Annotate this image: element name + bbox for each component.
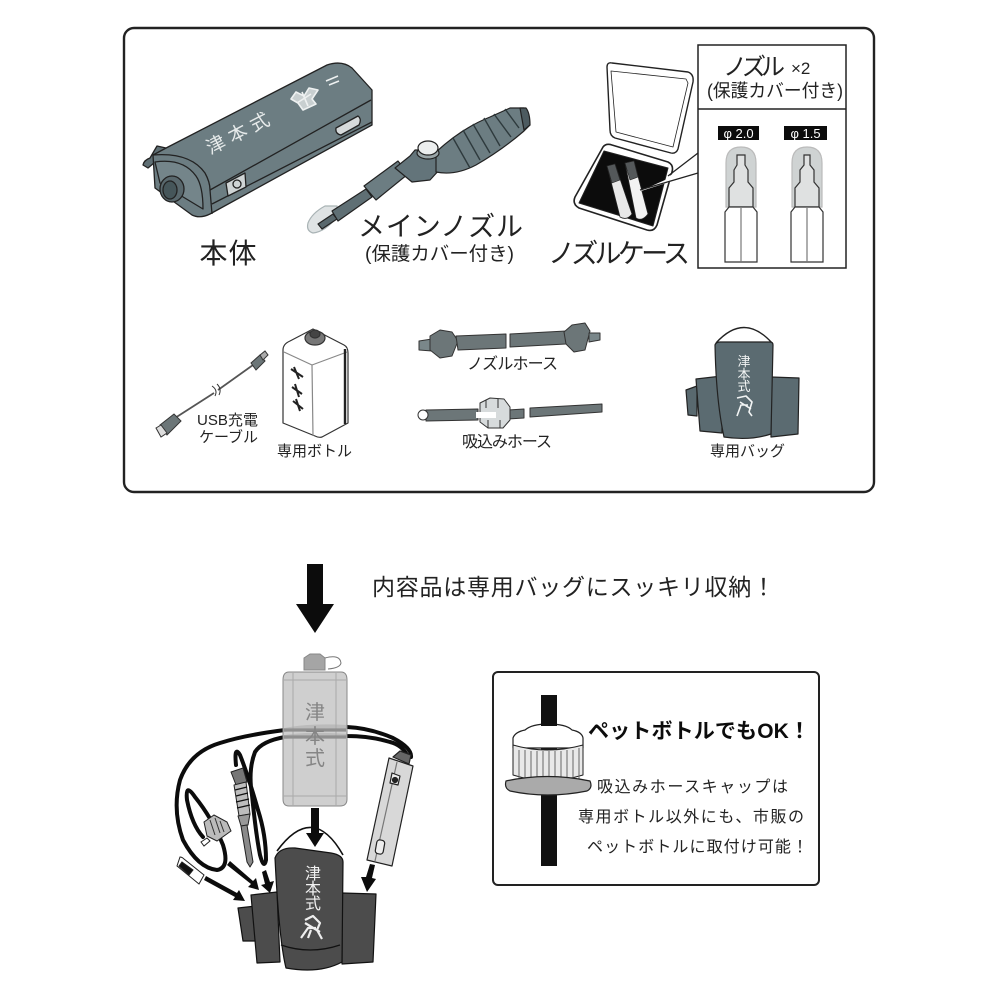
label: bottle: 専用ボトル (277, 443, 352, 460)
diagram: storage in bag (177, 654, 413, 970)
label: brand on unit: 津本式 (203, 109, 273, 159)
icon: mascot on unit (291, 88, 318, 110)
label: main nozzle: メインノズル (358, 212, 523, 242)
arrow: hose into pocket (227, 861, 259, 890)
icon: suction hose (418, 398, 602, 428)
text: pet bottle description: 専用ボトル以外にも、市販の (578, 808, 804, 826)
label: bag brand (305, 865, 321, 913)
icon: nozzle 1.5 (791, 147, 823, 262)
label: bag brand: 本 (737, 367, 751, 382)
arrow: bottle into bag (306, 808, 324, 847)
label: nozzle hose: ノズルホース (467, 355, 558, 373)
arrow: nozzle into pocket (261, 870, 274, 893)
label: bottle brand (305, 701, 325, 770)
label: bag brand: 式 (305, 895, 321, 913)
caption: 内容品は専用バッグにスッキリ収納！ (372, 574, 775, 600)
label: with protective cover: (保護カバー付き) (707, 81, 843, 101)
label: bottle brand: 式 (305, 747, 325, 770)
icon: dedicated bottle (283, 329, 348, 437)
tag: 1.5: φ 1.5 (790, 126, 821, 141)
arrow: down (296, 564, 334, 633)
callout lines (640, 153, 698, 190)
text: pet bottle description: 吸込みホースキャップは (597, 778, 788, 796)
icon: hoses (177, 726, 411, 870)
icon: main nozzle (308, 108, 530, 233)
heading: nozzle x2: ノズル (723, 54, 785, 81)
icon: main unit side view (367, 751, 413, 866)
icon: nozzle hose (419, 323, 600, 358)
tag: 2.0: φ 2.0 (723, 126, 754, 141)
panel: nozzle detail (698, 45, 846, 268)
icon: nozzle 2.0 (725, 147, 757, 262)
icon: hand nozzle (231, 768, 253, 867)
icon: usb cable pouch (177, 857, 204, 884)
label: bottle brand: 津 (305, 701, 325, 724)
icon: bag with pockets (238, 827, 376, 970)
icon: nozzle case (574, 63, 693, 230)
heading: nozzle x2: ×2 (791, 59, 810, 78)
panel: contents (124, 28, 874, 492)
label: bottle brand: 本 (305, 725, 325, 748)
label: bag brand: 津 (737, 354, 751, 369)
panel: pet bottle (493, 672, 819, 885)
icon: suction cap (201, 815, 231, 846)
arrow: usb into pocket (204, 876, 245, 901)
icon: usb cable (156, 351, 268, 437)
text: pet bottle description: ペットボトルに取付け可能！ (587, 838, 808, 856)
text: pet bottle description (578, 778, 808, 856)
label: bag brand: 津 (305, 865, 321, 883)
callout: nozzle zoom pointer (638, 153, 698, 192)
label: nozzle case: ノズルケース (548, 239, 690, 269)
icon: cap on hose (506, 695, 591, 866)
label: usb cable: ケーブル (199, 428, 258, 446)
label: main nozzle note: (保護カバー付き) (365, 243, 514, 265)
arrow: unit into pocket (361, 864, 376, 892)
label: bag brand: 式 (737, 379, 751, 394)
label: suction hose: 吸込みホース (462, 433, 552, 451)
heading: pet bottle ok: ペットボトルでもOK！ (588, 720, 810, 743)
icon: main unit (143, 63, 372, 217)
label: bag brand: 本 (305, 880, 321, 898)
label: main unit: 本体 (200, 238, 256, 269)
label: usb cable (197, 412, 258, 446)
icon: dedicated bag (686, 328, 799, 438)
label: usb cable: USB充電 (197, 412, 258, 429)
icon: transparent bottle (283, 654, 347, 806)
label: bag: 専用バッグ (710, 443, 785, 460)
label: bag brand (737, 354, 751, 394)
